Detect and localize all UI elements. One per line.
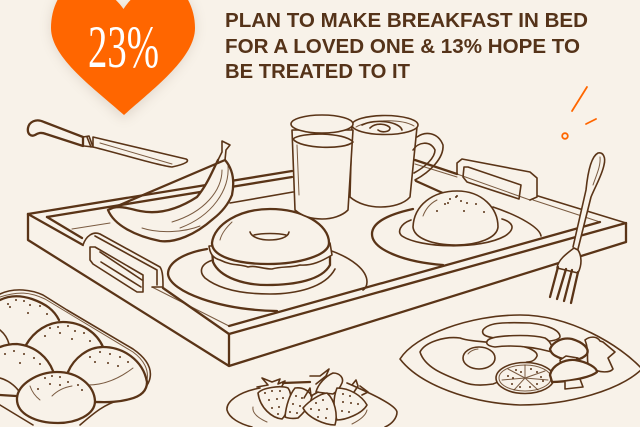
icon: orange sparks: [562, 87, 596, 139]
heading: [225, 10, 588, 83]
fork: [550, 153, 605, 303]
glass of juice: [291, 115, 353, 219]
tray handle: front left: [83, 233, 163, 292]
bun with sesame seeds: [413, 191, 498, 245]
heading: BE TREATED TO IT: [225, 61, 410, 83]
plate of strawberries: [227, 369, 397, 427]
tray handle: back right: [457, 159, 537, 200]
plate: right: [372, 207, 541, 265]
knife: [28, 120, 187, 167]
bread rolls on a plate: [0, 290, 150, 425]
plate: left with bagel: [168, 249, 367, 311]
banana: [108, 141, 233, 241]
strawberry 2: [285, 388, 312, 418]
mushrooms: [550, 337, 615, 389]
heading: FOR A LOVED ONE & 13% HOPE TO: [225, 36, 580, 58]
bagel: [209, 209, 332, 285]
tray: [28, 160, 626, 366]
icon: heart with 23%: [51, 0, 195, 119]
strawberry 1: [257, 378, 291, 419]
heading: PLAN TO MAKE BREAKFAST IN BED: [225, 10, 588, 32]
tomato slice: [496, 362, 554, 394]
strawberry 4: [334, 380, 368, 420]
sausages: [483, 323, 560, 352]
strawberry 5: [303, 388, 336, 425]
mug: [350, 116, 443, 207]
plate: fried breakfast: [400, 315, 640, 405]
strawberry 3: [310, 369, 343, 394]
fried egg: [420, 338, 537, 385]
icon: heart with 23%: 23%: [88, 14, 159, 80]
